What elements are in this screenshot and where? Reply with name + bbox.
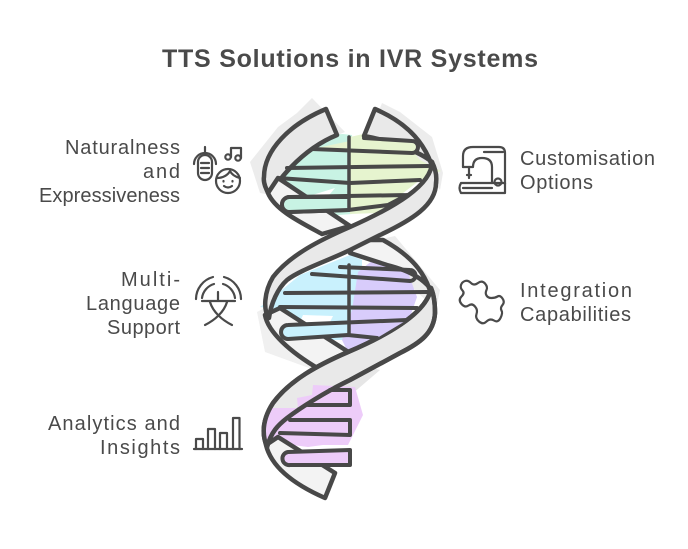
label: Customisation Options: Options — [520, 172, 593, 194]
label: Analytics and Insights: Analytics and — [48, 413, 180, 435]
strand 1: front ribbon — [265, 162, 436, 318]
strand 1: top right — [364, 109, 436, 183]
icon: microphone, music note and face — [194, 147, 241, 193]
label: Naturalness and Expressiveness: and — [143, 161, 180, 183]
label: Integration Capabilities — [520, 280, 632, 326]
label: Integration Capabilities: Capabilities — [520, 304, 631, 326]
rungs: group 3 — [280, 390, 350, 465]
white patches — [300, 188, 335, 322]
label: Customisation Options — [520, 148, 655, 194]
label: Analytics and Insights: Insights — [100, 437, 180, 459]
label: Naturalness and Expressiveness — [39, 137, 180, 207]
label: Multi-Language Support — [86, 269, 180, 339]
label: Multi-Language Support: Multi- — [121, 269, 180, 291]
pink tint on ribbon — [266, 385, 334, 440]
label: Naturalness and Expressiveness: Naturalness — [65, 137, 180, 159]
label: Naturalness and Expressiveness: Expressiveness — [39, 185, 180, 207]
label: Analytics and Insights — [48, 413, 180, 459]
label: Multi-Language Support: Support — [107, 317, 180, 339]
label: Multi-Language Support: Language — [86, 293, 180, 315]
sketch shading: grey — [250, 98, 443, 400]
icon: language antenna — [196, 277, 241, 325]
icon: bar chart — [194, 418, 242, 449]
label: Integration Capabilities: Integration — [520, 280, 632, 302]
strand 2: front ribbon — [264, 288, 435, 447]
back strand: mid right — [350, 240, 434, 313]
colour fill: yellow — [350, 132, 441, 214]
back strand: top left lower — [268, 178, 350, 234]
rungs: group 1 — [278, 137, 428, 212]
strand 2: front ribbon outline — [264, 288, 435, 447]
icon: sewing machine — [460, 147, 505, 193]
back strand: mid left lower — [265, 308, 350, 369]
back strand: top left — [264, 109, 337, 196]
back strand: tail — [266, 437, 335, 498]
icon: puzzle piece — [460, 281, 504, 323]
label: Customisation Options: Customisation — [520, 148, 655, 170]
colour fill: blue — [260, 255, 362, 340]
colour fill: pink — [262, 385, 363, 447]
rungs: group 2 — [280, 265, 427, 339]
colour fill: purple — [342, 260, 417, 350]
colour fill: green — [278, 134, 352, 217]
title: TTS Solutions in IVR Systems — [162, 45, 538, 73]
dna helix — [250, 98, 443, 498]
